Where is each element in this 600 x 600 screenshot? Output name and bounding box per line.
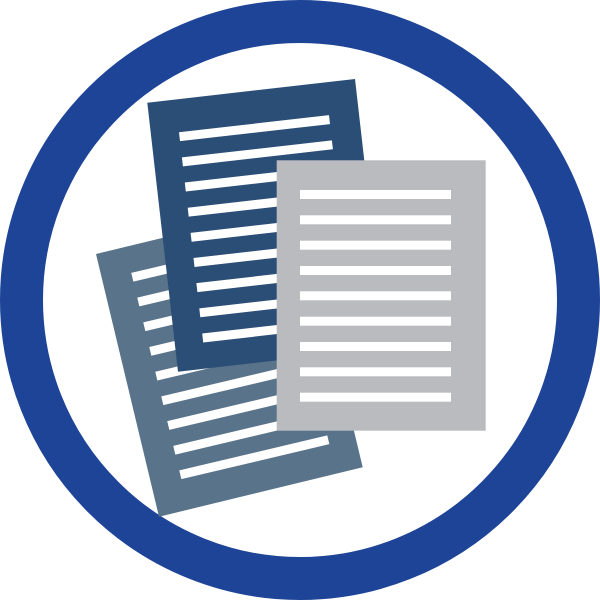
- middle page: navy: [147, 79, 386, 372]
- front page: grey: [277, 160, 486, 431]
- back page: slate blue: [96, 205, 363, 517]
